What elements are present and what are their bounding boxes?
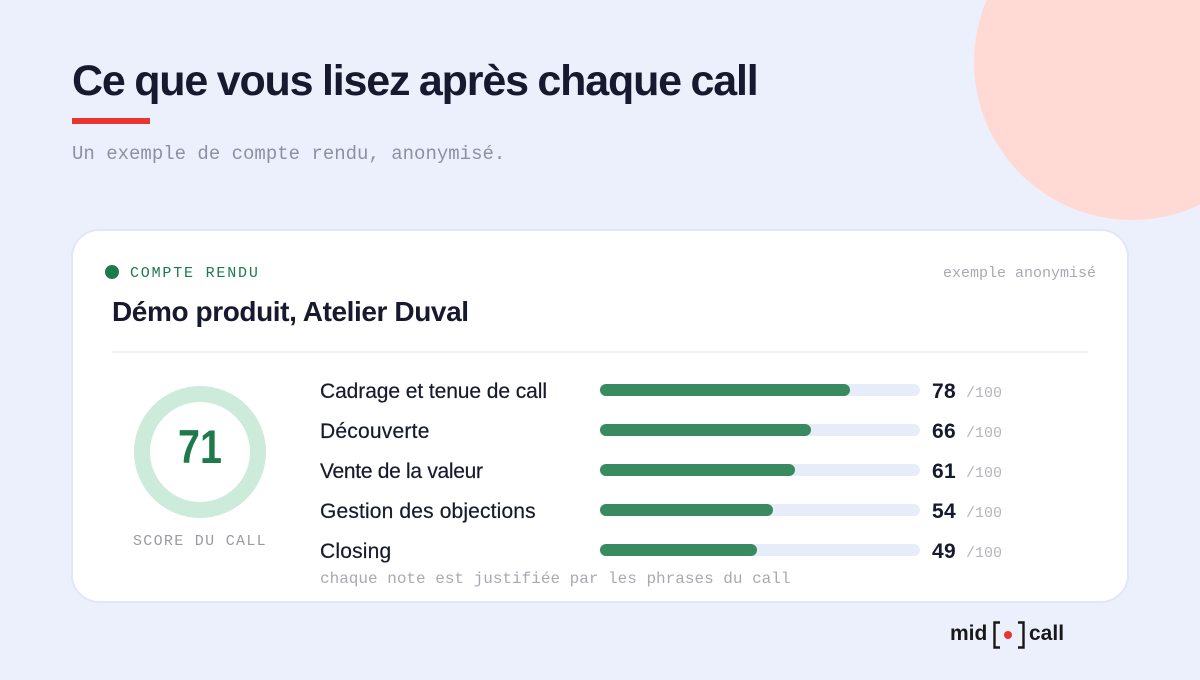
score: 78 xyxy=(932,380,956,403)
panel: report card xyxy=(71,229,1129,603)
bar xyxy=(600,504,920,516)
max: /100 xyxy=(966,465,1002,482)
score rows xyxy=(320,380,1002,563)
bar xyxy=(600,544,920,556)
card label: COMPTE RENDU xyxy=(130,265,260,282)
anonymised note: exemple anonymisé xyxy=(943,265,1096,282)
row: vente xyxy=(320,460,1002,483)
score label: SCORE DU CALL xyxy=(133,533,267,550)
criterion label: Vente de la valeur xyxy=(320,460,483,483)
score value: 71 xyxy=(178,420,222,473)
max: /100 xyxy=(966,545,1002,562)
bar xyxy=(600,424,920,436)
row: objections xyxy=(320,500,1002,523)
max: /100 xyxy=(966,425,1002,442)
decorative circle xyxy=(974,0,1200,220)
bar xyxy=(600,384,920,396)
score: 66 xyxy=(932,420,956,443)
ring xyxy=(134,386,266,518)
red accent bar xyxy=(72,118,150,124)
score ring xyxy=(134,386,266,518)
card heading: Démo produit, Atelier Duval xyxy=(112,296,469,327)
row: closing xyxy=(320,540,1002,563)
max: /100 xyxy=(966,385,1002,402)
logo word: mid: mid xyxy=(950,622,987,645)
criterion label: Découverte xyxy=(320,420,430,443)
status dot xyxy=(105,265,119,279)
footnote: chaque note est justifiée par les phrases du call xyxy=(320,570,790,588)
logo xyxy=(950,621,1064,649)
criterion label: Gestion des objections xyxy=(320,500,536,523)
subtitle: Un exemple de compte rendu, anonymisé. xyxy=(72,143,505,165)
divider xyxy=(112,351,1088,353)
row: cadrage xyxy=(320,380,1002,403)
score: 54 xyxy=(932,500,956,523)
bar xyxy=(600,464,920,476)
criterion label: Closing xyxy=(320,540,391,563)
criterion label: Cadrage et tenue de call xyxy=(320,380,547,403)
logo word: call: call xyxy=(1029,622,1064,645)
title: Ce que vous lisez après chaque call xyxy=(72,57,758,105)
score: 61 xyxy=(932,460,956,483)
logo bracket mark xyxy=(993,621,1025,649)
row: découverte xyxy=(320,420,1002,443)
max: /100 xyxy=(966,505,1002,522)
score: 49 xyxy=(932,540,956,563)
